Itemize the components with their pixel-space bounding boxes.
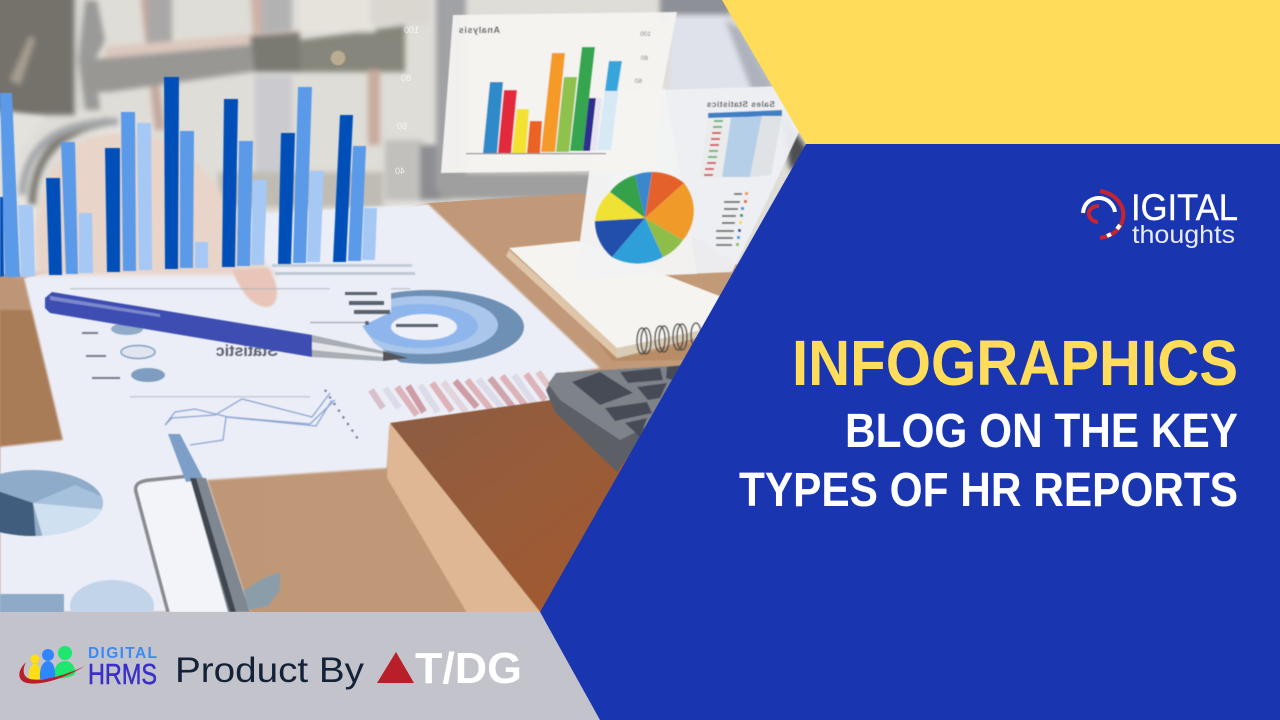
subheading line 1: BLOG ON THE KEY — [845, 405, 1238, 458]
photo: printed lines under bars — [70, 264, 415, 290]
footer logos — [19, 644, 522, 693]
photo: sleeve and hand — [0, 110, 280, 275]
photo: translucent sales statistics panel — [575, 86, 800, 279]
photo: translucent pie panel — [575, 88, 697, 279]
photo: pink striped bar chart — [371, 372, 555, 415]
blue title panel — [540, 144, 1280, 720]
photo: overlay axis values: 40 — [395, 166, 405, 176]
photo: overlay blue bar chart — [0, 77, 377, 277]
yellow corner shape — [722, 0, 1280, 144]
analysis axis labels: 60 — [634, 78, 642, 85]
title text block — [739, 327, 1238, 517]
photo: colored pie chart — [595, 172, 694, 264]
photo: calculator — [546, 365, 690, 472]
photo: small paper icons — [82, 323, 310, 398]
photo: shirt near right corner — [660, 0, 815, 170]
photo: line chart — [165, 390, 360, 445]
pie legend — [716, 192, 748, 246]
photo: translucent analysis panel — [441, 12, 677, 173]
logo text: DIGITAL: DIGITAL — [88, 645, 157, 662]
photo: shirt base — [0, 0, 820, 310]
photo: pale pie chart on clipboard — [0, 470, 154, 612]
logo text: HRMS: HRMS — [88, 659, 157, 691]
analysis axis labels — [634, 31, 651, 85]
photo: plaid shirt pattern — [0, 0, 610, 207]
analysis axis labels: 100 — [640, 31, 651, 38]
sales table rows — [704, 120, 723, 176]
photo: translucent sales statistics panel: Sales Statistics — [706, 99, 775, 109]
photo: doughnut chart — [330, 283, 524, 366]
analysis axis labels: 80 — [640, 55, 648, 62]
photo: overlay axis values: 60 — [397, 121, 407, 131]
icon: red triangle — [377, 652, 414, 683]
photo: overlay axis values: 100 — [404, 25, 419, 35]
photo: wood block — [387, 400, 680, 618]
logo wordmark: IGITAL — [1131, 187, 1238, 228]
photo: left wood panel — [0, 310, 63, 447]
photo: overlay axis values: 80 — [401, 73, 411, 83]
icon: Digital Thoughts swirl — [1083, 191, 1123, 238]
photo: notebook — [506, 241, 722, 361]
photo: wooden table — [0, 193, 760, 620]
photo: fingertip — [232, 268, 277, 307]
photo: notebook spiral rings — [637, 323, 701, 354]
grey footer band — [0, 612, 600, 720]
analysis bar chart — [466, 47, 622, 154]
photo: shirt button — [330, 50, 346, 66]
photo: pen — [45, 292, 408, 361]
photo: desk with reports and charts — [0, 0, 820, 632]
photo: main report paper — [0, 204, 600, 612]
text: product by: Product By — [175, 651, 365, 690]
logo tagline: thoughts — [1132, 221, 1235, 249]
logo: Digital Thoughts — [1083, 187, 1238, 249]
sales table — [708, 110, 782, 118]
heading: infographics: INFOGRAPHICS — [792, 327, 1238, 399]
photo: mirrored statistic text: Statistic — [216, 343, 278, 360]
photo: translucent analysis panel: Analysis — [458, 25, 500, 35]
photo: overlay axis values — [395, 25, 419, 176]
icon: Digital HRMS people — [19, 646, 85, 684]
photo: doughnut labels — [310, 292, 438, 327]
photo: clipboard clip — [136, 434, 280, 612]
logo text: T/DG: T/DG — [415, 644, 522, 693]
